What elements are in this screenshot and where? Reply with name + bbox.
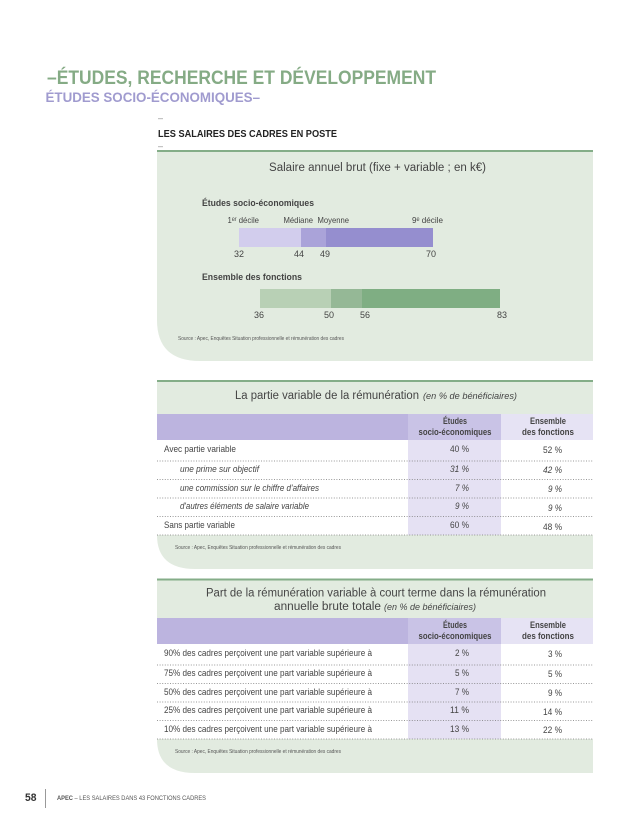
table header: Études bbox=[443, 620, 467, 631]
panel title: part variable: annuelle brute totale bbox=[274, 601, 381, 613]
bar values: études bbox=[234, 249, 436, 260]
section heading: – bbox=[158, 113, 163, 123]
table body: 25% des cadres perçoivent une part variable supérieure à bbox=[164, 705, 373, 716]
table header: socio-économiques bbox=[418, 631, 492, 642]
footer: APEC – LES SALAIRES DANS 43 FONCTIONS CADRES bbox=[57, 795, 207, 802]
table body: 11 % bbox=[450, 705, 469, 716]
table body: 2 % bbox=[455, 648, 469, 659]
table body: 5 % bbox=[455, 668, 469, 679]
panel title: partie variable: La partie variable de la rémunération bbox=[235, 390, 419, 402]
bar values: ensemble: 83 bbox=[497, 310, 507, 321]
title: –ÉTUDES, RECHERCHE ET DÉVELOPPEMENT bbox=[47, 67, 436, 89]
table body: 22 % bbox=[543, 725, 562, 736]
table body: 14 % bbox=[543, 707, 562, 718]
table header: des fonctions bbox=[522, 631, 574, 642]
bar values: études: 70 bbox=[426, 249, 436, 260]
panel: salaire annuel brut bbox=[157, 150, 593, 361]
table body: Sans partie variable bbox=[164, 520, 235, 531]
source: Source : Apec, Enquêtes Situation professionnelle et rémunération des cadres bbox=[175, 749, 341, 755]
table body: 42 % bbox=[543, 465, 562, 476]
section heading: LES SALAIRES DES CADRES EN POSTE bbox=[158, 128, 337, 140]
panel title: salaire: Salaire annuel brut (fixe + variable ; en k€) bbox=[269, 162, 486, 174]
source: Source : Apec, Enquêtes Situation professionnelle et rémunération des cadres bbox=[178, 336, 344, 342]
panel title: part variable: (en % de bénéficiaires) bbox=[384, 602, 476, 613]
table header: Ensemble bbox=[530, 620, 566, 631]
bar values: ensemble: 56 bbox=[360, 310, 370, 321]
table body: 9 % bbox=[455, 501, 469, 512]
table body: 52 % bbox=[543, 445, 562, 456]
bar labels bbox=[228, 215, 443, 225]
table body: 75% des cadres perçoivent une part variable supérieure à bbox=[164, 668, 373, 679]
table header: Ensemble bbox=[530, 416, 566, 427]
subheading: ensemble des fonctions: Ensemble des fonctions bbox=[202, 272, 302, 283]
table body: une commission sur le chiffre d'affaires bbox=[180, 483, 319, 494]
bar labels: Médiane bbox=[284, 215, 313, 225]
panel: part de la rémunération variable bbox=[157, 578, 593, 773]
table header: socio-économiques bbox=[418, 427, 492, 438]
table body: Avec partie variable bbox=[164, 444, 236, 455]
subheading: études socio-économiques: Études socio-économiques bbox=[202, 198, 314, 209]
panel: partie variable bbox=[157, 380, 593, 569]
table body: 9 % bbox=[548, 484, 562, 495]
table body: 90% des cadres perçoivent une part variable supérieure à bbox=[164, 648, 373, 659]
footer bbox=[25, 789, 207, 808]
source: Source : Apec, Enquêtes Situation professionnelle et rémunération des cadres bbox=[175, 545, 341, 551]
bar values: ensemble: 50 bbox=[324, 310, 334, 321]
bar: études socio-économiques bbox=[239, 228, 433, 247]
table body: 10% des cadres perçoivent une part variable supérieure à bbox=[164, 724, 373, 735]
table body: 31 % bbox=[450, 464, 469, 475]
bar values: études: 49 bbox=[320, 249, 330, 260]
table body: 9 % bbox=[548, 503, 562, 514]
footer: 58 bbox=[25, 792, 36, 804]
table body: 9 % bbox=[548, 688, 562, 699]
panel title: part variable bbox=[206, 588, 546, 613]
section heading: – bbox=[158, 141, 163, 151]
bar: ensemble des fonctions bbox=[260, 289, 500, 308]
table header bbox=[157, 414, 593, 440]
table body: 13 % bbox=[450, 724, 469, 735]
bar values: études: 44 bbox=[294, 249, 304, 260]
bar values: ensemble: 36 bbox=[254, 310, 264, 321]
table body: 7 % bbox=[455, 687, 469, 698]
bar labels: 9ᵉ décile bbox=[412, 215, 443, 225]
table body: d'autres éléments de salaire variable bbox=[180, 501, 309, 512]
panel title: partie variable bbox=[235, 390, 517, 402]
table body: une prime sur objectif bbox=[180, 464, 260, 475]
panel title: part variable: Part de la rémunération variable à court terme dans la rémunération bbox=[206, 588, 546, 600]
subtitle: ÉTUDES SOCIO-ÉCONOMIQUES– bbox=[46, 89, 260, 105]
table header: Études bbox=[443, 416, 467, 427]
table body: 5 % bbox=[548, 669, 562, 680]
bar labels: 1ᵉʳ décile bbox=[228, 215, 259, 225]
table body: 40 % bbox=[450, 444, 469, 455]
table header: des fonctions bbox=[522, 427, 574, 438]
table header bbox=[157, 618, 593, 644]
bar values: études: 32 bbox=[234, 249, 244, 260]
bar labels: Moyenne bbox=[318, 215, 349, 225]
panel title: partie variable: (en % de bénéficiaires) bbox=[423, 391, 517, 402]
table body: 3 % bbox=[548, 649, 562, 660]
table body: 60 % bbox=[450, 520, 469, 531]
table body: 50% des cadres perçoivent une part variable supérieure à bbox=[164, 687, 373, 698]
table body: 48 % bbox=[543, 522, 562, 533]
table body bbox=[157, 644, 593, 739]
bar values: ensemble bbox=[254, 310, 507, 321]
section heading bbox=[158, 113, 337, 151]
table body: 7 % bbox=[455, 483, 469, 494]
table body bbox=[157, 440, 593, 535]
